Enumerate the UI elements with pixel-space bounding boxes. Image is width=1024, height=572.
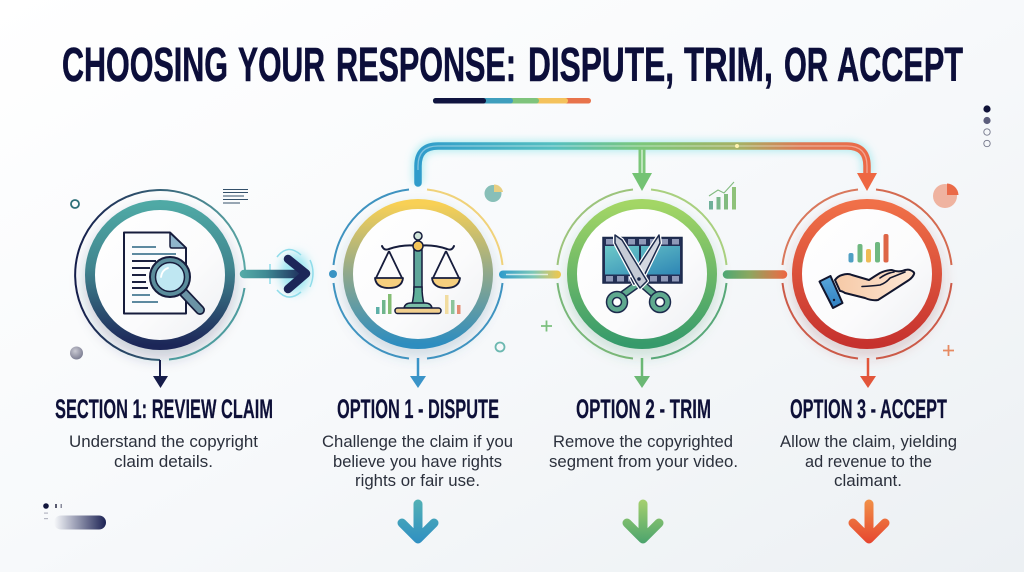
description: Understand the copyright (69, 433, 258, 451)
thick ring and disc (348, 204, 488, 344)
icon: text lines (223, 190, 248, 203)
down arrow (641, 358, 643, 378)
icon: mini bar chart (709, 182, 736, 210)
description: ad revenue to the (805, 453, 932, 471)
bottom arrow: accept (853, 504, 885, 539)
panel: option 2 trim (558, 190, 726, 388)
bottom arrow: dispute (402, 504, 434, 539)
ring shadow (791, 205, 943, 357)
icon: grey ball (70, 346, 83, 360)
icon: plus green (541, 320, 552, 332)
panel: option 3 accept (782, 190, 952, 388)
title: OR (784, 39, 828, 92)
panel: section 1 review claim (75, 190, 245, 388)
caption: option 3 (780, 394, 957, 490)
icon: open hand with bars (820, 234, 914, 308)
down arrow (867, 358, 869, 378)
arrowhead: to accept (857, 173, 877, 191)
heading: OPTION 1 - DISPUTE (337, 394, 499, 424)
outer thin ring (75, 190, 245, 360)
bottom arrow: trim (627, 504, 659, 539)
icon: plus orange (943, 345, 954, 356)
arrowhead: to trim (632, 173, 652, 191)
caption: section 1 (55, 394, 273, 471)
title: YOUR (238, 39, 325, 92)
thick ring and disc (572, 204, 712, 344)
heading: OPTION 2 - TRIM (576, 394, 711, 424)
icon: scales of justice (375, 232, 460, 314)
caption: option 1 (322, 394, 513, 490)
description: Allow the claim, yielding (780, 433, 957, 451)
description (549, 433, 738, 471)
description (322, 433, 513, 490)
ring shadow (342, 205, 494, 357)
outer thin ring (334, 190, 409, 265)
icon: small ring (496, 342, 504, 352)
description (69, 433, 258, 471)
caption: option 2 (549, 394, 738, 471)
decorative icons (70, 182, 958, 360)
title: DISPUTE, (528, 39, 674, 92)
heading: SECTION 1: REVIEW CLAIM (55, 394, 273, 424)
description (780, 433, 957, 490)
description: claim details. (114, 453, 213, 471)
down arrow (417, 358, 419, 378)
icon: pie chart orange (933, 184, 958, 208)
title: RESPONSE: (336, 39, 516, 92)
description: segment from your video. (549, 453, 738, 471)
icon: ring top-left (71, 200, 79, 208)
icon: pie chart teal (484, 184, 503, 202)
icon: document with magnifier (124, 232, 200, 314)
arrow: review to options (244, 249, 313, 297)
thick ring and disc (797, 204, 937, 344)
outer thin ring (558, 190, 633, 265)
top branching connector (418, 144, 877, 191)
bottom-left decorative widget (43, 503, 106, 530)
ring shadow (84, 207, 236, 359)
title underline colour bar (433, 98, 591, 104)
down arrow (159, 360, 161, 378)
icon: film strip and scissors (603, 235, 682, 310)
description: believe you have rights (333, 453, 502, 471)
description: claimant. (834, 472, 902, 490)
outer thin ring (782, 190, 858, 265)
mini bars (376, 307, 380, 314)
description: Challenge the claim if you (322, 433, 513, 451)
connector: dispute to trim (502, 270, 558, 280)
description: Remove the copyrighted (553, 433, 733, 451)
panel: option 1 dispute (329, 190, 502, 388)
ring shadow (566, 205, 718, 357)
thick ring and disc (90, 205, 230, 345)
connector: trim to accept (727, 270, 783, 279)
title (62, 39, 963, 92)
title: CHOOSING (62, 39, 228, 92)
title: TRIM, (684, 39, 773, 92)
description: rights or fair use. (355, 472, 480, 490)
pagination dots (983, 105, 991, 147)
